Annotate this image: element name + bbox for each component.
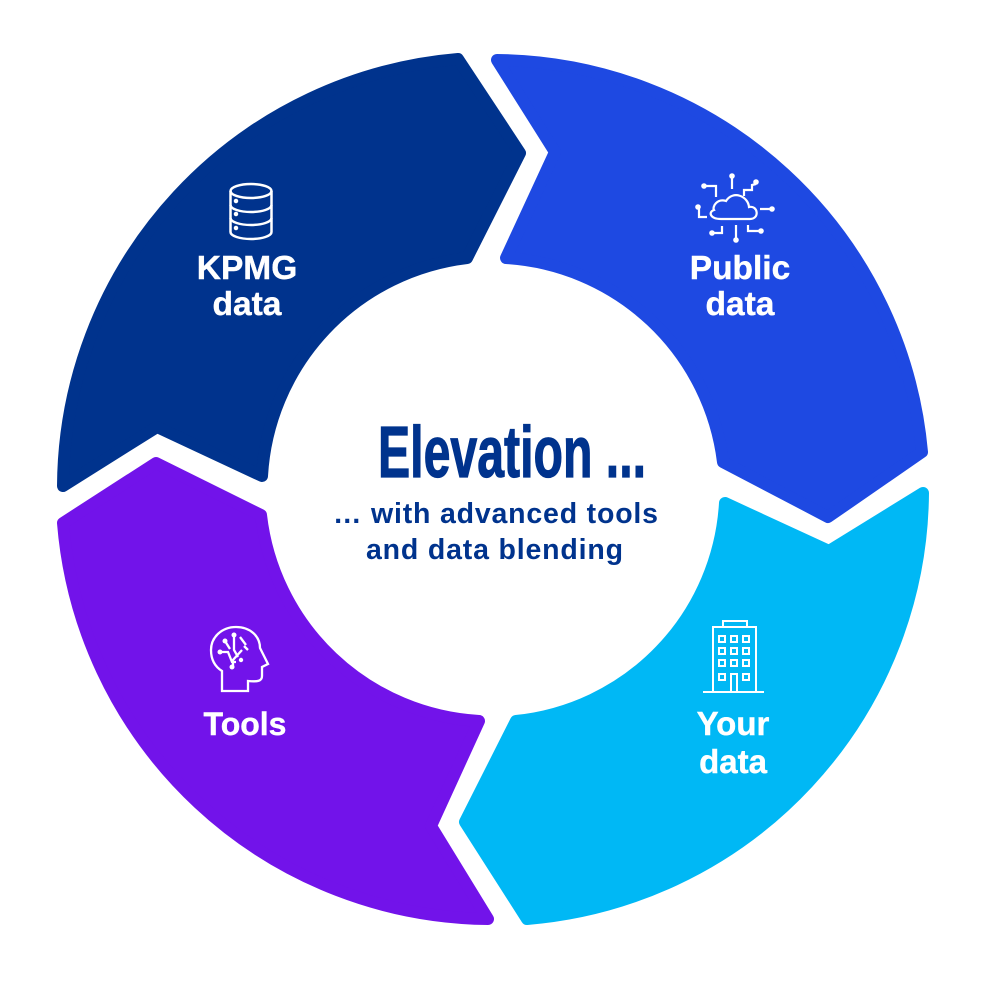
text block: subtitle: … with advanced tools <box>333 498 658 530</box>
segment: Tools arrow <box>63 463 488 919</box>
panel: Your data <box>465 493 923 919</box>
text block: subtitle: and data blending <box>366 534 623 566</box>
panel: KPMG data <box>63 59 520 486</box>
icon: head with circuits <box>211 627 268 691</box>
heading: Elevation: Elevation ... <box>378 413 646 493</box>
icon: cloud network <box>695 173 775 243</box>
label: Public data: Public <box>690 250 790 287</box>
panel: Tools <box>63 463 488 919</box>
icon: office building <box>703 621 764 692</box>
segment: Your data arrow <box>465 493 923 919</box>
label: Your data: Your <box>697 705 769 742</box>
label: KPMG data: data <box>213 286 282 323</box>
icon: database <box>230 184 272 239</box>
label: Your data: data <box>699 743 768 780</box>
segment: Public data arrow <box>497 60 922 517</box>
label: Public data: data <box>706 286 775 323</box>
label: KPMG data: KPMG <box>197 250 297 287</box>
panel: Public data <box>497 60 922 517</box>
label: Tools: Tools <box>204 706 286 742</box>
segment: KPMG data arrow <box>63 59 520 486</box>
